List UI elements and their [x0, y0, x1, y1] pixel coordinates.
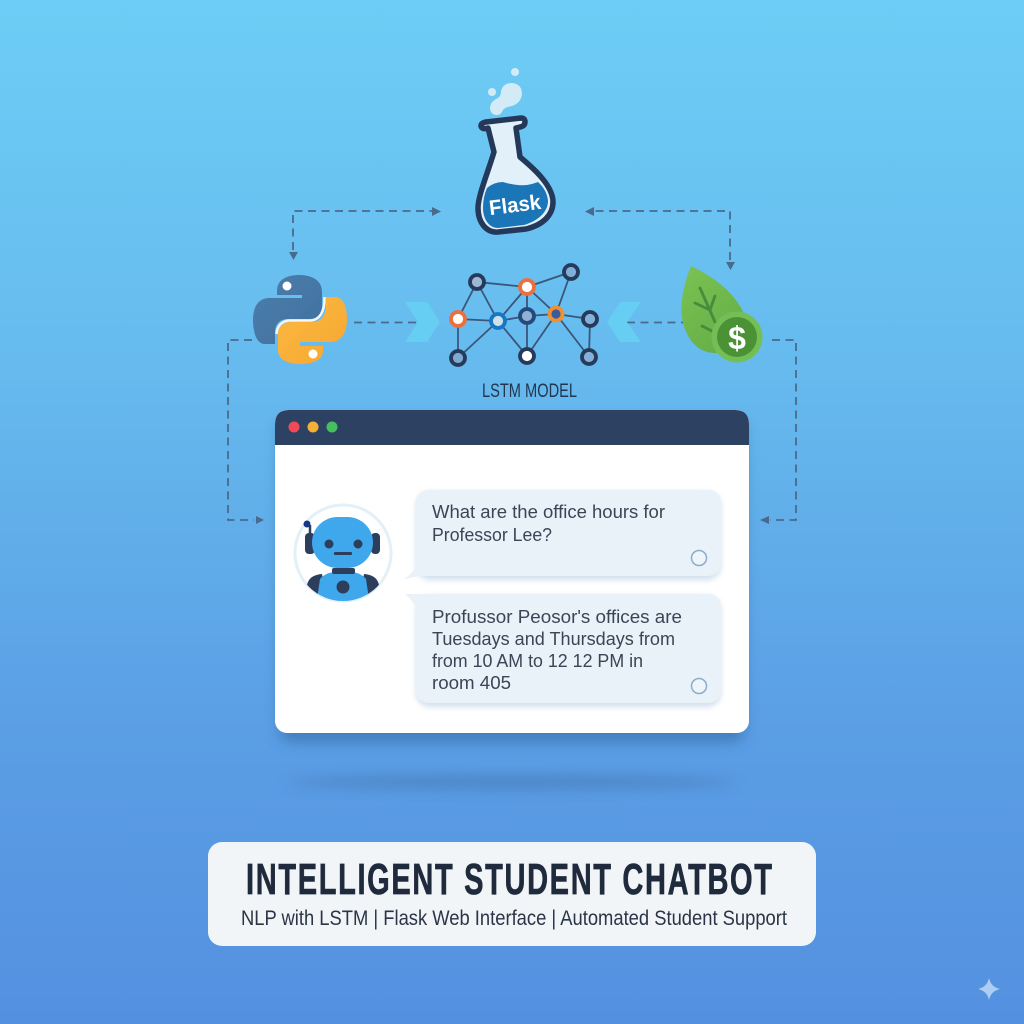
window control dots [288, 422, 338, 432]
chat bubble: question: Professor Lee? [432, 525, 552, 545]
chat bubble: answer [405, 594, 721, 707]
icon: Python logo [253, 275, 347, 364]
chat bubble: answer: room 405 [432, 673, 511, 693]
icon: right chevron [607, 302, 641, 342]
icon: Flask logo: Flask [488, 191, 543, 220]
panel: chat window [275, 410, 749, 742]
chat bubble: question [404, 490, 721, 580]
window title bar [275, 410, 749, 445]
panel: title banner [208, 842, 816, 946]
dashed connectors [228, 211, 796, 520]
floor shadow [287, 776, 737, 788]
icon: left chevron [405, 302, 440, 342]
icon: robot avatar [295, 505, 391, 606]
LSTM model label: LSTM MODEL [482, 381, 577, 402]
chat bubble: answer: Tuesdays and Thursdays from [432, 629, 675, 649]
icon: leaf with dollar coin: $ [728, 320, 746, 356]
title: INTELLIGENT STUDENT CHATBOT [246, 854, 772, 903]
neural network diagram [451, 265, 597, 365]
subtitle: NLP with LSTM | Flask Web Interface | Automated Student Support [241, 907, 787, 930]
chat bubble: answer: from 10 AM to 12 12 PM in [432, 651, 643, 671]
icon: Flask logo [478, 68, 553, 232]
chat bubble: answer: Profussor Peosor's offices are [432, 607, 682, 627]
icon: leaf with dollar coin [681, 266, 762, 362]
arrowheads [256, 207, 769, 524]
icon: sparkle [978, 978, 1000, 1000]
chat bubble: question: What are the office hours for [432, 502, 665, 522]
